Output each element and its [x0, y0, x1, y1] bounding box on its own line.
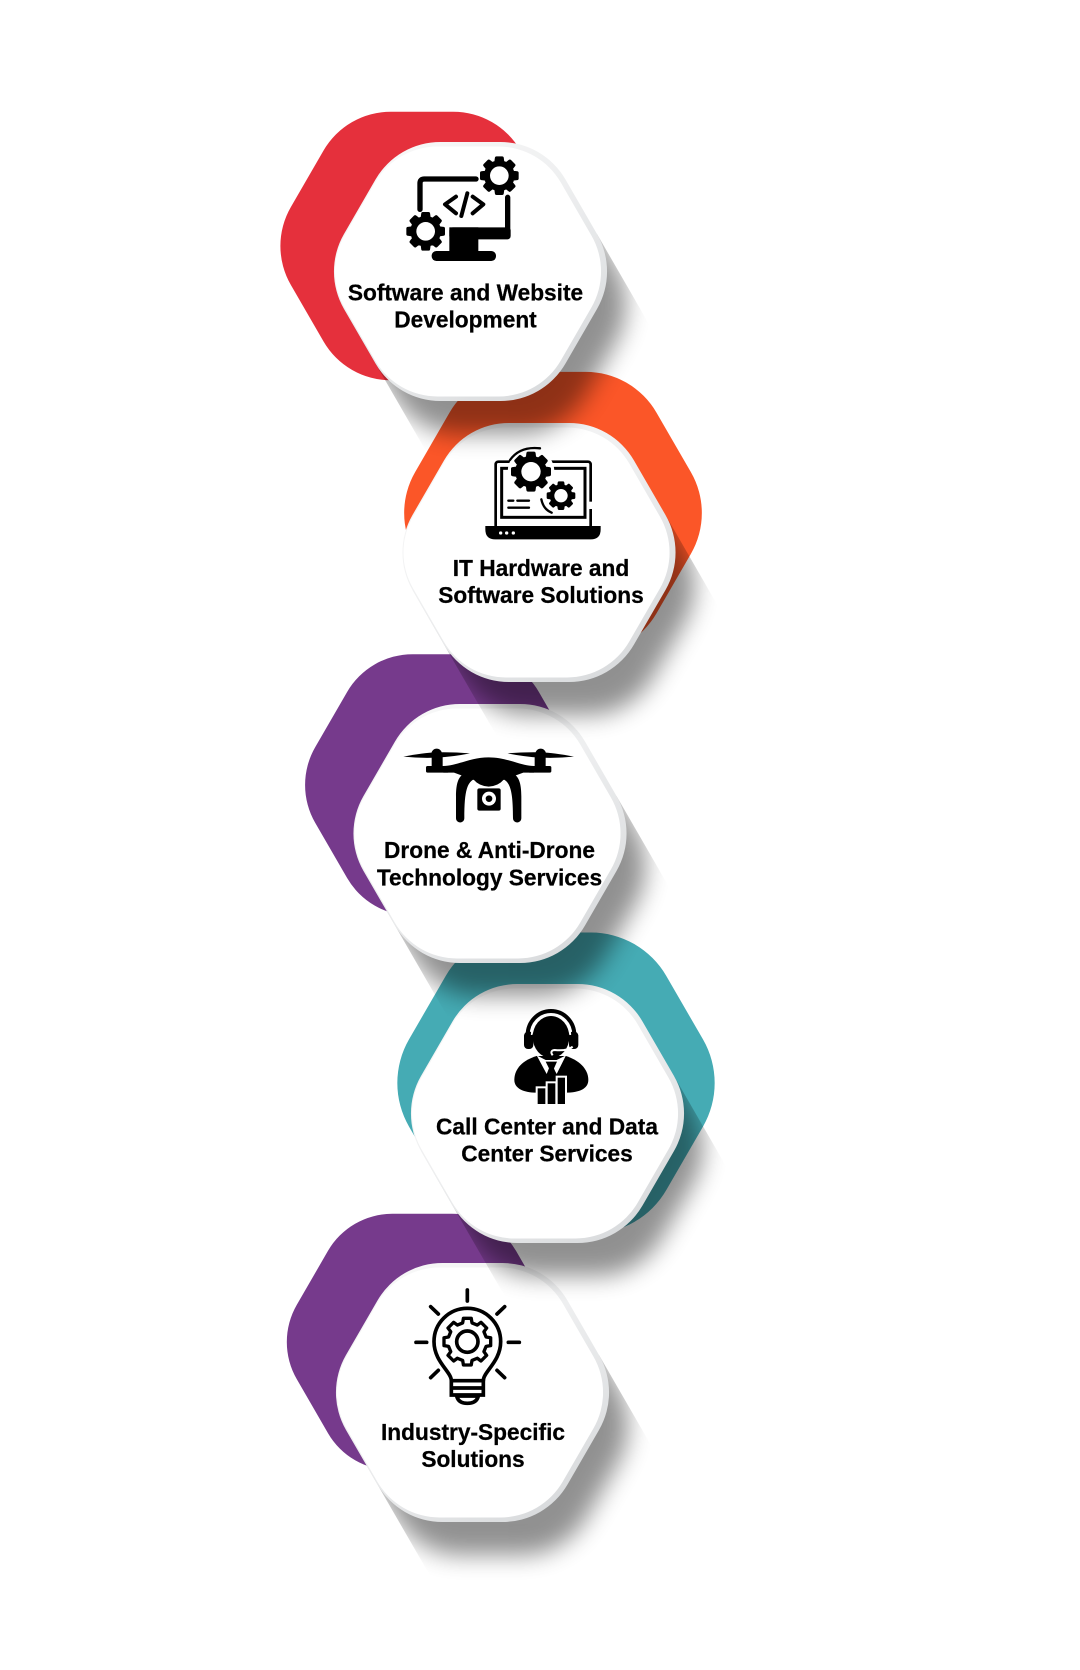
card: Drone and Anti-Drone Technology Services	[305, 654, 646, 996]
label: Development	[394, 306, 537, 332]
label: Call Center and Data	[436, 1114, 658, 1140]
white hexagon panel	[334, 142, 607, 401]
card: Industry-Specific Solutions	[287, 1214, 628, 1555]
drop shadow	[418, 515, 710, 731]
red backing hexagon	[280, 112, 564, 380]
label: Software and Website	[348, 280, 583, 306]
white hexagon panel	[411, 984, 684, 1243]
icon: drone	[403, 749, 574, 822]
orange backing hexagon	[404, 372, 702, 654]
purple backing hexagon	[305, 654, 581, 916]
icon: monitor with code and gears	[408, 158, 517, 261]
icon: call center agent with bar chart	[514, 1011, 588, 1105]
label: Solutions	[421, 1446, 525, 1472]
icon: light bulb with gear	[416, 1290, 519, 1403]
label: Industry-Specific	[381, 1419, 565, 1445]
purple backing hexagon	[287, 1214, 557, 1470]
drop shadow	[350, 234, 641, 450]
white hexagon panel	[353, 704, 627, 963]
card: Software and Website Development	[280, 112, 626, 434]
drop shadow	[427, 1077, 718, 1292]
label: Center Services	[461, 1140, 633, 1166]
card: IT Hardware and Software Solutions	[402, 372, 702, 715]
teal backing hexagon	[397, 933, 715, 1233]
white hexagon panel	[336, 1263, 609, 1522]
icon: laptop with gears	[485, 448, 601, 539]
label: Drone & Anti-Drone	[384, 837, 595, 863]
card: Call Center and Data Center Services	[397, 933, 715, 1276]
label: Software Solutions	[438, 582, 644, 608]
label: IT Hardware and	[453, 555, 629, 581]
label: Technology Services	[377, 864, 602, 890]
drop shadow	[365, 1355, 643, 1571]
white hexagon panel	[402, 423, 676, 682]
drop shadow	[386, 796, 660, 1012]
